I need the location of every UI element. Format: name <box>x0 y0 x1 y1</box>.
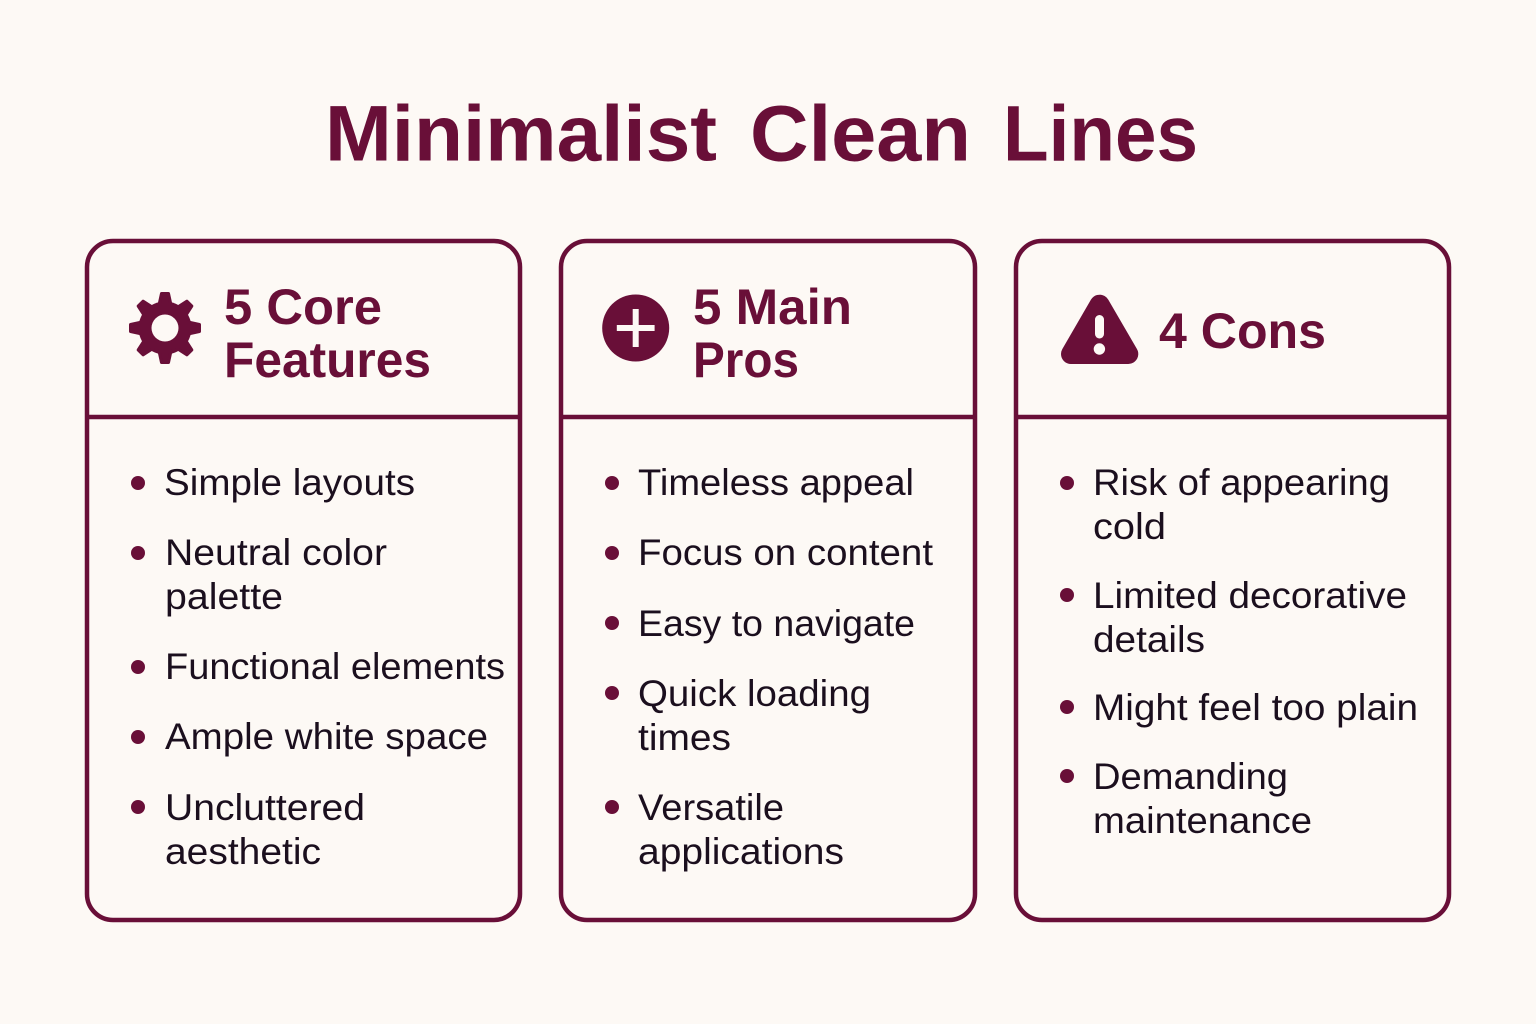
list: pros: Focus on content <box>638 532 934 573</box>
list: pros: Versatile <box>638 787 784 828</box>
icon: gear <box>130 294 200 362</box>
panel: 5 core features <box>87 241 520 920</box>
heading: 5 Core Features <box>224 279 431 388</box>
list: features: Ample white space <box>165 716 488 757</box>
list: features: Neutral color <box>165 532 387 573</box>
heading: 5 Main Pros <box>693 279 852 388</box>
list: pros: Timeless appeal <box>638 462 914 503</box>
heading: 4 Cons: 4 Cons <box>1159 303 1326 359</box>
title <box>325 88 1198 178</box>
list: features: aesthetic <box>165 831 321 872</box>
icon: warning triangle <box>1071 305 1128 355</box>
list: features: Functional elements <box>165 646 505 687</box>
list: pros: times <box>638 717 731 758</box>
title: Lines <box>1003 88 1198 178</box>
title: Clean <box>750 88 971 178</box>
list: pros: applications <box>638 831 844 872</box>
icon: plus circle <box>602 294 669 362</box>
heading: 5 Main Pros: 5 Main <box>693 279 852 335</box>
list: cons: maintenance <box>1093 800 1312 841</box>
title: Minimalist <box>325 88 717 178</box>
panel: 5 main pros <box>561 241 975 920</box>
list: pros: Quick loading <box>638 673 871 714</box>
list: cons: Might feel too plain <box>1093 687 1418 728</box>
list: features: palette <box>165 576 283 617</box>
list: cons <box>1060 462 1418 841</box>
list: pros: Easy to navigate <box>638 603 915 644</box>
list: features: Simple layouts <box>164 462 415 503</box>
list: cons: Demanding <box>1093 756 1288 797</box>
list: cons: details <box>1093 619 1205 660</box>
list: cons: cold <box>1093 506 1166 547</box>
heading: 5 Core Features: 5 Core <box>224 279 382 335</box>
list: cons: Limited decorative <box>1093 575 1407 616</box>
heading: 5 Main Pros: Pros <box>693 332 799 388</box>
heading: 5 Core Features: Features <box>224 332 431 388</box>
list: features: Uncluttered <box>165 787 365 828</box>
list: cons: Risk of appearing <box>1093 462 1390 503</box>
list: features <box>131 462 505 872</box>
list: pros <box>605 462 934 872</box>
panel: 4 cons <box>1016 241 1449 920</box>
